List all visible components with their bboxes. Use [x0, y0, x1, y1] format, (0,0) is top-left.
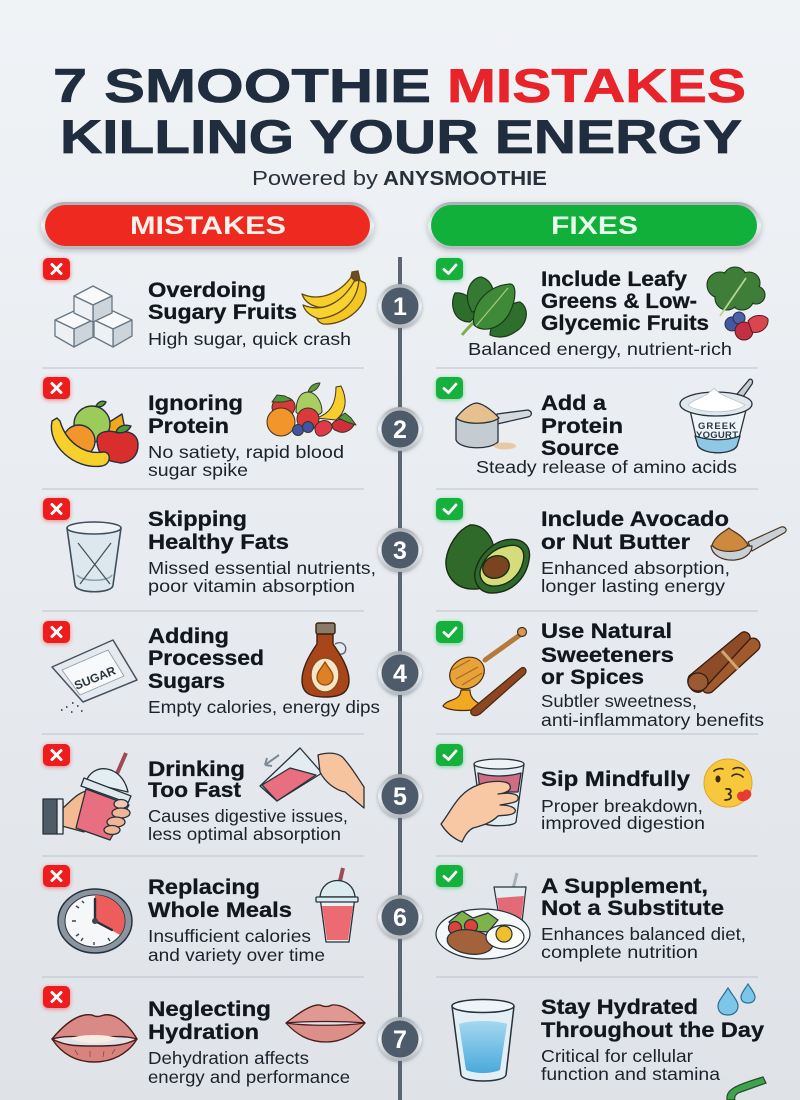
description: Balanced energy, nutrient-rich — [468, 339, 732, 359]
header: mistakes — [41, 202, 374, 249]
panel: fix 4 — [436, 619, 764, 730]
badge: cross — [43, 986, 70, 1008]
icon: hand gripping smoothie cup — [43, 753, 131, 840]
description: Enhanced absorption, — [541, 558, 730, 578]
heading — [541, 874, 724, 920]
description — [541, 558, 730, 596]
description: Proper breakdown, — [541, 796, 703, 816]
icon: greek yogurt — [680, 379, 753, 453]
heading: Too Fast — [148, 778, 241, 802]
icon: spinach leaves — [453, 277, 526, 337]
panel: fix 1 — [436, 258, 768, 359]
heading: Ignoring — [148, 391, 243, 415]
step number 1 — [378, 284, 422, 328]
badge: cross — [43, 865, 70, 887]
centre timeline line — [398, 257, 402, 1100]
row dividers — [42, 368, 758, 977]
heading — [541, 507, 729, 554]
description — [148, 1048, 350, 1087]
description: Causes digestive issues, — [148, 806, 348, 826]
heading: Replacing — [148, 875, 260, 899]
panel: fix 7 — [452, 984, 766, 1100]
description: No satiety, rapid blood — [148, 442, 344, 462]
description — [541, 1046, 720, 1084]
description: Insufficient calories — [148, 926, 311, 946]
description — [148, 926, 325, 965]
title: KILLING YOUR ENERGY — [60, 110, 742, 163]
description: complete nutrition — [541, 942, 698, 962]
heading: Drinking — [148, 757, 245, 781]
description — [148, 806, 348, 844]
icon: protein scoop — [456, 403, 531, 450]
step number 7 — [378, 1017, 422, 1061]
badge: cross — [43, 498, 70, 520]
icon: dry lips right — [286, 1005, 365, 1042]
description: Enhances balanced diet, — [541, 924, 746, 944]
description — [148, 558, 376, 596]
badge: cross — [43, 258, 70, 280]
heading: Sugary Fruits — [148, 300, 297, 324]
step number 5: 5 — [393, 783, 407, 811]
heading — [148, 997, 271, 1044]
icon: water drops — [718, 984, 755, 1015]
description: Steady release of amino acids — [476, 457, 737, 477]
description: sugar spike — [148, 460, 248, 480]
description — [148, 442, 344, 480]
heading: Protein — [148, 414, 229, 438]
heading: Glycemic Fruits — [541, 311, 709, 335]
step number 1: 1 — [393, 293, 407, 321]
heading — [148, 278, 297, 324]
badge: check — [436, 498, 463, 520]
icon: smoothie cup — [316, 868, 358, 942]
panel: mistake 7 — [43, 986, 365, 1087]
panel: mistake 4 — [43, 621, 380, 717]
icon: kale and berries — [707, 267, 768, 340]
step number 3: 3 — [393, 537, 407, 565]
step number 6 — [378, 895, 422, 939]
step number 2 — [378, 407, 422, 451]
heading: Neglecting — [148, 997, 271, 1021]
subtitle — [252, 168, 547, 190]
step number 7: 7 — [393, 1026, 407, 1054]
heading: Sweeteners — [541, 643, 674, 667]
panel: fix 3 — [436, 498, 786, 596]
heading: Not a Substitute — [541, 896, 724, 920]
icon: greek yogurt: GREEK — [698, 421, 736, 432]
heading: Healthy Fats — [148, 530, 289, 554]
icon: mixed fruit — [51, 401, 138, 466]
description: anti-inflammatory benefits — [541, 710, 764, 730]
panel: mistake 1 — [43, 258, 366, 349]
heading: Include Avocado — [541, 507, 729, 531]
panel: fix 6 — [436, 865, 746, 962]
description: longer lasting energy — [541, 576, 725, 596]
icon: tilted glass with hand — [260, 748, 364, 808]
heading — [148, 875, 292, 922]
badge: check — [436, 621, 463, 643]
description — [541, 924, 746, 962]
description: energy and performance — [148, 1067, 350, 1087]
heading: Throughout the Day — [541, 1018, 764, 1042]
heading — [148, 757, 245, 802]
icon: honey dipper and cinnamon — [443, 628, 526, 716]
step number 3 — [378, 528, 422, 572]
title: MISTAKES — [447, 59, 746, 112]
description: less optimal absorption — [148, 824, 341, 844]
heading: Protein — [541, 414, 623, 438]
icon: empty glass with X — [67, 522, 121, 592]
heading — [541, 267, 709, 335]
badge: check — [436, 258, 463, 280]
icon: cinnamon sticks — [688, 632, 760, 693]
icon: nut butter spoon — [711, 527, 786, 560]
heading: Include Leafy — [541, 267, 687, 291]
description: poor vitamin absorption — [148, 576, 355, 596]
subtitle: Powered by — [252, 168, 378, 190]
description: High sugar, quick crash — [148, 329, 351, 349]
icon: bananas — [302, 271, 366, 324]
heading — [541, 391, 623, 460]
badge: cross — [43, 377, 70, 399]
step number 2: 2 — [393, 416, 407, 444]
heading: Sugars — [148, 669, 225, 693]
icon: greek yogurt: YOGURT — [696, 430, 738, 441]
heading: Processed — [148, 646, 264, 670]
title: 7 SMOOTHIE — [53, 59, 431, 112]
icon: avocado — [446, 525, 530, 593]
icon: kissing emoji — [704, 759, 752, 807]
header: fixes: FIXES — [551, 212, 638, 240]
panel: mistake 3 — [43, 498, 376, 596]
description: improved digestion — [541, 813, 705, 833]
panel: mistake 5 — [43, 744, 364, 844]
heading: Overdoing — [148, 278, 266, 302]
heading — [148, 624, 264, 693]
description: Dehydration affects — [148, 1048, 309, 1068]
badge: cross — [43, 744, 70, 766]
icon: hand holding glass — [441, 759, 524, 842]
description: function and stamina — [541, 1064, 720, 1084]
badge: check — [436, 865, 463, 887]
header: fixes — [428, 202, 761, 249]
heading — [541, 619, 674, 689]
heading — [148, 391, 243, 438]
subtitle: ANYSMOOTHIE — [383, 168, 547, 190]
heading — [541, 995, 764, 1042]
heading: Sip Mindfully — [541, 767, 690, 791]
heading: or Spices — [541, 665, 644, 689]
panel: mistake 2 — [43, 377, 356, 480]
heading: Adding — [148, 624, 229, 648]
badge: check — [436, 377, 463, 399]
badge: cross — [43, 621, 70, 643]
icon: syrup bottle — [302, 623, 349, 697]
icon: clock — [58, 889, 132, 953]
heading: Skipping — [148, 507, 247, 531]
step number 6: 6 — [393, 904, 407, 932]
heading: Hydration — [148, 1020, 259, 1044]
heading: Stay Hydrated — [541, 995, 698, 1019]
heading — [148, 507, 289, 554]
description: Subtler sweetness, — [541, 691, 697, 711]
icon: glass of water — [452, 1000, 514, 1081]
icon: sugar cubes — [55, 286, 132, 347]
heading: A Supplement, — [541, 874, 708, 898]
description — [541, 796, 705, 833]
description: and variety over time — [148, 945, 325, 965]
heading: Source — [541, 436, 619, 460]
panel: mistake 6 — [43, 865, 358, 965]
step number 5 — [378, 774, 422, 818]
title — [53, 59, 746, 163]
description: Missed essential nutrients, — [148, 558, 376, 578]
heading: Add a — [541, 391, 607, 415]
icon: dry lips — [52, 1015, 137, 1062]
heading: Whole Meals — [148, 898, 292, 922]
panel: fix 2 — [436, 377, 753, 477]
heading: Use Natural — [541, 619, 672, 643]
step number 4 — [378, 651, 422, 695]
icon: meal plate with smoothie — [436, 873, 530, 959]
description: Critical for cellular — [541, 1046, 693, 1066]
panel: fix 5 — [436, 744, 752, 842]
step number 4: 4 — [393, 660, 407, 688]
icon: fruit pile — [267, 383, 356, 436]
header: mistakes: MISTAKES — [130, 212, 286, 240]
icon: sugar packet: SUGAR — [72, 663, 118, 693]
heading: Greens & Low- — [541, 289, 697, 313]
icon: green straw — [727, 1077, 766, 1100]
icon: sugar packet — [52, 640, 137, 712]
badge: check — [436, 744, 463, 766]
heading: or Nut Butter — [541, 530, 691, 554]
description — [541, 691, 764, 730]
description: Empty calories, energy dips — [148, 697, 380, 717]
